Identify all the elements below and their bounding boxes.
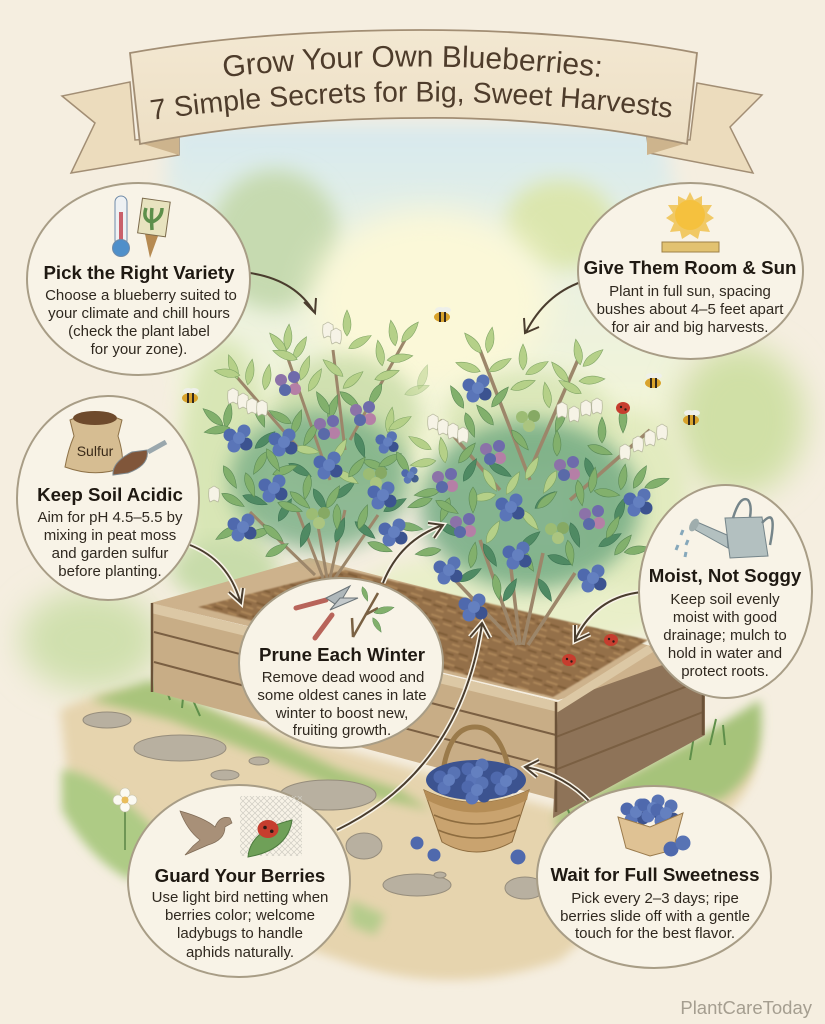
title text: 7 Simple Secrets for Big, Sweet Harvests — [150, 80, 672, 120]
icon: berry box — [618, 794, 690, 856]
panel: guard your berries: ladybugs to handle — [177, 925, 303, 942]
icon: daisy flower — [113, 788, 137, 850]
icon: sun and ruler — [662, 192, 719, 252]
panel: moist, not soggy: Moist, Not Soggy — [649, 565, 802, 586]
panel: guard your berries: aphids naturally. — [186, 944, 294, 961]
icon: bird, netting and ladybug — [180, 796, 302, 857]
grass — [90, 680, 430, 810]
panel: prune each winter: winter to boost new, — [275, 705, 408, 722]
panel: keep soil acidic: before planting. — [58, 563, 162, 580]
panel: prune each winter — [239, 578, 443, 748]
panel: prune each winter: some oldest canes in late — [257, 687, 427, 704]
top rim — [151, 603, 653, 712]
panel: wait for full sweetness: touch for the best flavor. — [575, 925, 735, 942]
panel: prune each winter: Prune Each Winter — [259, 644, 425, 665]
panel: prune each winter: Remove dead wood and — [262, 669, 424, 686]
panel: moist, not soggy: hold in water and — [668, 645, 782, 662]
panel: moist, not soggy: drainage; mulch to — [663, 627, 787, 644]
icon: sulfur sack and scoop — [65, 411, 166, 475]
mulch — [198, 570, 648, 697]
panel: moist, not soggy: protect roots. — [681, 663, 769, 680]
icon: watering can — [676, 499, 773, 558]
left face — [151, 603, 558, 800]
panel: pick the right variety — [27, 183, 250, 375]
panel: give them room and sun: bushes about 4–5 feet apart — [597, 301, 784, 318]
sky wash — [160, 125, 700, 500]
foliage wash background — [20, 170, 805, 690]
blueberry bush left — [200, 310, 431, 578]
foliage core — [230, 410, 410, 550]
icon: pruners and twig — [296, 586, 395, 638]
ribbon tail left — [62, 82, 179, 173]
panel: guard your berries: Guard Your Berries — [155, 865, 325, 886]
panel: moist, not soggy: moist with good — [673, 609, 777, 626]
arrows — [190, 273, 642, 830]
panel: prune each winter: fruiting growth. — [293, 722, 391, 739]
panel: guard your berries: Use light bird netting when — [152, 889, 328, 906]
icon: thermometer and plant label — [112, 196, 170, 258]
panel: pick the right variety: Choose a blueberry suited to — [45, 287, 237, 304]
panel: pick the right variety: (check the plant label — [68, 323, 210, 340]
panel: keep soil acidic — [17, 396, 199, 600]
panel: keep soil acidic: Keep Soil Acidic — [37, 484, 183, 505]
panel: pick the right variety: Pick the Right Variety — [43, 262, 235, 283]
raised wooden bed — [151, 558, 705, 818]
stepping stones — [83, 712, 545, 899]
title banner — [60, 29, 764, 174]
panel: moist, not soggy — [639, 485, 812, 698]
panel: give them room and sun: Give Them Room & Sun — [584, 257, 796, 278]
title text: Grow Your Own Blueberries: — [224, 46, 600, 77]
panel: pick the right variety: for your zone). — [91, 341, 187, 358]
panel: wait for full sweetness: Pick every 2–3 days; ripe — [571, 890, 739, 907]
foliage core — [420, 420, 640, 590]
foliage haze — [270, 355, 420, 485]
panel: keep soil acidic: Aim for pH 4.5–5.5 by — [37, 509, 183, 526]
right face — [553, 650, 705, 818]
title text — [150, 46, 672, 120]
panel: guard your berries: berries color; welcome — [165, 907, 315, 924]
ribbon folds — [140, 137, 687, 155]
panel: keep soil acidic: mixing in peat moss — [44, 527, 176, 544]
panel: give them room and sun: Plant in full sun, spacing — [609, 283, 771, 300]
panel: wait for full sweetness: berries slide off with a gentle — [560, 908, 750, 925]
blueberry bush right — [406, 327, 671, 645]
bees and ladybugs — [182, 307, 700, 666]
ground — [60, 680, 762, 980]
panel: wait for full sweetness — [537, 786, 771, 968]
ribbon main — [130, 30, 697, 144]
foliage haze — [445, 370, 615, 470]
watermark: PlantCareToday — [680, 997, 813, 1018]
panel: guard your berries — [128, 785, 350, 977]
back wall — [151, 558, 705, 700]
panel: keep soil acidic: and garden sulfur — [52, 545, 168, 562]
icon: sulfur sack and scoop: Sulfur — [77, 443, 114, 459]
ribbon tail right — [647, 83, 762, 173]
panel: give them room and sun — [578, 183, 803, 359]
panel: pick the right variety: your climate and chill hours — [48, 305, 230, 322]
panel: moist, not soggy: Keep soil evenly — [670, 591, 780, 608]
woven basket of blueberries — [410, 727, 529, 864]
panel: give them room and sun: for air and big harvests. — [612, 319, 768, 336]
panel: wait for full sweetness: Wait for Full Sweetness — [550, 864, 760, 885]
